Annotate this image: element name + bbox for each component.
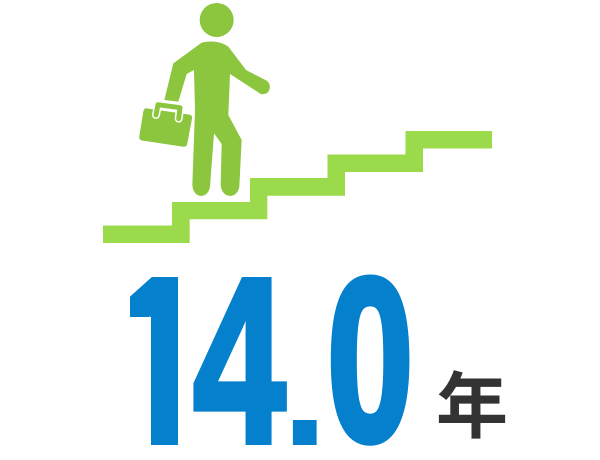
big number: 14.0 <box>130 272 413 450</box>
infographic: years of service <box>103 3 506 446</box>
staircase <box>103 131 492 243</box>
unit: year: 年 <box>436 368 508 448</box>
head <box>200 3 234 37</box>
body <box>164 41 270 196</box>
icon: briefcase <box>139 105 192 147</box>
icon: businessman walking with briefcase <box>139 3 270 196</box>
